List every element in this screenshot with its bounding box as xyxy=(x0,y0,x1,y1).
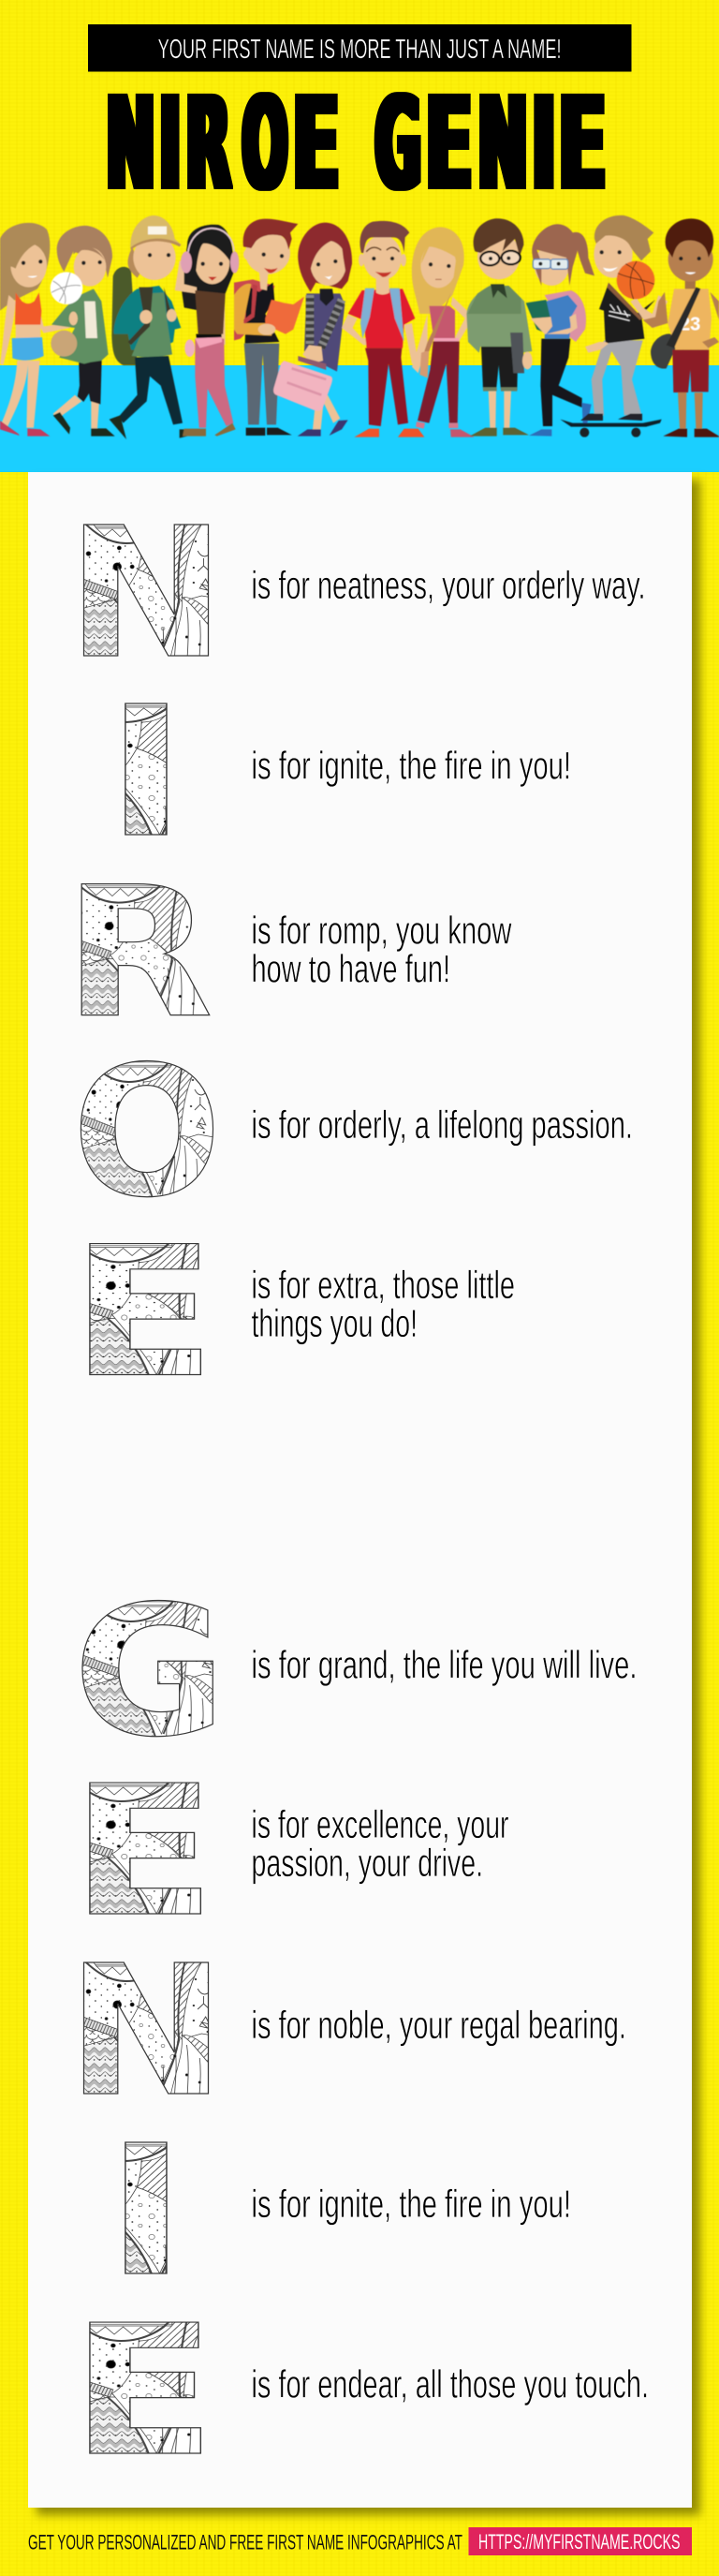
figure: girl with ponytail xyxy=(526,224,594,437)
banner: tagline xyxy=(88,24,631,71)
letter I: I xyxy=(105,2107,187,2317)
title: E xyxy=(558,71,607,219)
illustration: group of students xyxy=(0,215,719,439)
title: I xyxy=(532,71,556,219)
letter E: E xyxy=(70,1207,216,1417)
lines: extra xyxy=(251,1263,515,1345)
row: I for ignite xyxy=(105,2107,571,2317)
lines: romp: how to have fun! xyxy=(251,947,450,991)
line: ignite: is for ignite, the fire in you! xyxy=(251,744,571,788)
letter R: R xyxy=(64,850,213,1059)
letter O: O xyxy=(72,1028,222,1236)
figures right: last four students xyxy=(466,215,719,437)
figure: curly-haired boy with tank top: 23 xyxy=(680,314,700,334)
figure: girl with volleyball xyxy=(51,226,115,437)
figure: boy in red tee xyxy=(342,221,424,437)
lines: excellence: is for excellence, your xyxy=(251,1802,509,1846)
row: E for endear xyxy=(70,2287,649,2495)
title: G xyxy=(375,71,421,219)
figure: blonde girl xyxy=(412,227,475,437)
title: E xyxy=(292,71,340,219)
title: N xyxy=(106,71,155,219)
row: R for romp xyxy=(64,850,512,1059)
figure: girl with pink bag xyxy=(273,223,352,437)
lines: extra: things you do! xyxy=(251,1301,418,1345)
figures centre: next four students xyxy=(234,219,475,437)
figure: boy with glasses xyxy=(466,218,533,437)
figure: girl in orange top xyxy=(0,223,70,437)
figures left: first four students xyxy=(0,215,239,439)
row: N for neatness xyxy=(66,488,646,699)
letter G: G xyxy=(73,1568,227,1777)
letter I: I xyxy=(105,668,187,878)
figure: boy with book and red backpack xyxy=(234,219,304,436)
title: I xyxy=(159,71,181,219)
lines: romp: is for romp, you know xyxy=(251,909,512,952)
line: ignite: is for ignite, the fire in you! xyxy=(251,2182,571,2226)
figure: curly-haired boy with tank top xyxy=(643,218,719,437)
letter N: N xyxy=(66,1926,226,2137)
title: O xyxy=(242,71,287,219)
row: E for excellence xyxy=(70,1747,509,1956)
lines: romp xyxy=(251,909,512,991)
figure: boy with cap and backpack xyxy=(110,215,187,439)
title: E xyxy=(425,71,473,219)
lines: excellence: passion, your drive. xyxy=(251,1841,483,1885)
letter E: E xyxy=(70,1747,216,1956)
row: O for orderly xyxy=(72,1028,633,1236)
panel: letter acrostic xyxy=(28,472,692,2508)
row: E for extra xyxy=(70,1207,515,1417)
figure: boy on skateboard with basketball xyxy=(560,215,668,437)
letter N: N xyxy=(66,488,226,699)
row: I for ignite xyxy=(105,668,571,878)
lines: excellence xyxy=(251,1802,509,1885)
row: N for noble xyxy=(66,1926,626,2137)
title: N xyxy=(477,71,528,219)
figure: girl with headphones xyxy=(175,225,239,437)
lines: extra: is for extra, those little xyxy=(251,1263,515,1307)
blue floor band xyxy=(0,365,719,472)
title: R xyxy=(185,71,230,219)
row: G for grand xyxy=(73,1568,637,1777)
footer call to action: GET YOUR PERSONALIZED AND FREE FIRST NAME INFOGRAPHICS AT xyxy=(28,2531,462,2554)
letter E: E xyxy=(70,2287,216,2495)
